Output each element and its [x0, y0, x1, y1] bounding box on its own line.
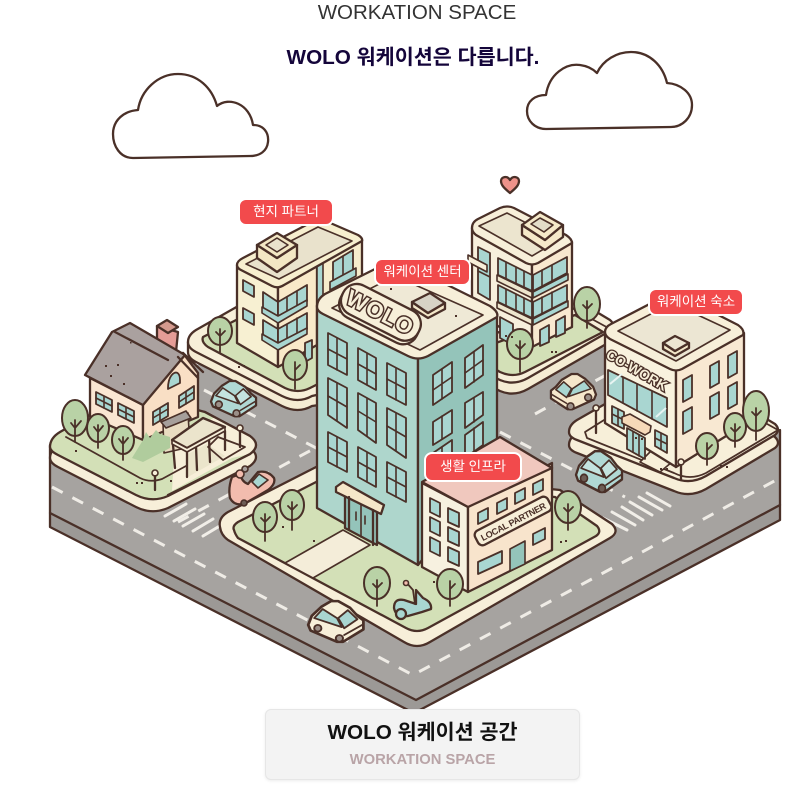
- scooter: pink: [229, 466, 274, 506]
- crosswalk right: [603, 493, 670, 530]
- island: right block: [569, 400, 778, 494]
- house windows: [96, 373, 194, 425]
- sign: local partner: LOCAL PARTNER: [479, 501, 548, 543]
- chimney: [157, 320, 178, 352]
- building: back tower: [468, 206, 572, 347]
- label: 현지 파트너: [238, 198, 334, 226]
- car: teal left: [211, 381, 256, 417]
- sign: CO-WORK: CO-WORK: [604, 346, 670, 394]
- crosswalk left: [165, 504, 223, 536]
- title: WORKATION SPACE: [318, 1, 516, 24]
- street lamps: [152, 405, 684, 490]
- house door: [161, 411, 191, 453]
- WOLO sign: [334, 279, 426, 349]
- island: house block: [50, 392, 256, 511]
- roof box: [663, 336, 689, 356]
- trees: [62, 287, 769, 606]
- right windows: [478, 479, 545, 574]
- road base slab: [50, 342, 780, 712]
- building: partner block: [237, 220, 362, 367]
- roof box: [412, 293, 445, 318]
- car: cream front: [308, 601, 363, 642]
- car: teal right: [576, 451, 622, 492]
- WOLO sign: WOLO: [342, 285, 418, 340]
- building: house: [85, 320, 225, 477]
- heading: WOLO 워케이션은 다릅니다.: [287, 46, 539, 69]
- left windows: [430, 498, 459, 566]
- windows left face: [328, 333, 406, 502]
- car: beige back: [551, 374, 596, 410]
- windows right face: [433, 345, 483, 475]
- building: co-work: [604, 294, 744, 467]
- caption title: WOLO 워케이션 공간: [327, 721, 518, 744]
- roof box: [522, 212, 563, 250]
- island: back right: [490, 305, 613, 394]
- label: 현지 파트너: 현지 파트너: [253, 204, 319, 219]
- cloud left: [113, 74, 268, 158]
- label: 생활 인프라: [424, 452, 522, 482]
- label: 생활 인프라: 생활 인프라: [440, 459, 506, 474]
- walkway: [285, 530, 370, 578]
- pergola: [172, 418, 225, 477]
- label: 워케이션 숙소: 워케이션 숙소: [657, 294, 735, 309]
- caption subtitle: WORKATION SPACE: [350, 752, 495, 768]
- building: WOLO center: [317, 262, 497, 565]
- scattered dots: [75, 288, 728, 583]
- caption card: [265, 709, 580, 780]
- icon: heart: [501, 177, 519, 193]
- label: 워케이션 센터: [374, 258, 471, 286]
- label: 워케이션 숙소: [648, 288, 744, 316]
- cloud right: [527, 52, 692, 129]
- moped: teal: [394, 580, 431, 619]
- island: center block: [220, 465, 616, 646]
- label: 워케이션 센터: 워케이션 센터: [383, 264, 462, 279]
- island: back left: [188, 305, 340, 410]
- building: local partner: [422, 437, 553, 592]
- sign: local partner: [473, 495, 553, 547]
- roof box: [257, 233, 297, 272]
- entrance: [336, 482, 384, 545]
